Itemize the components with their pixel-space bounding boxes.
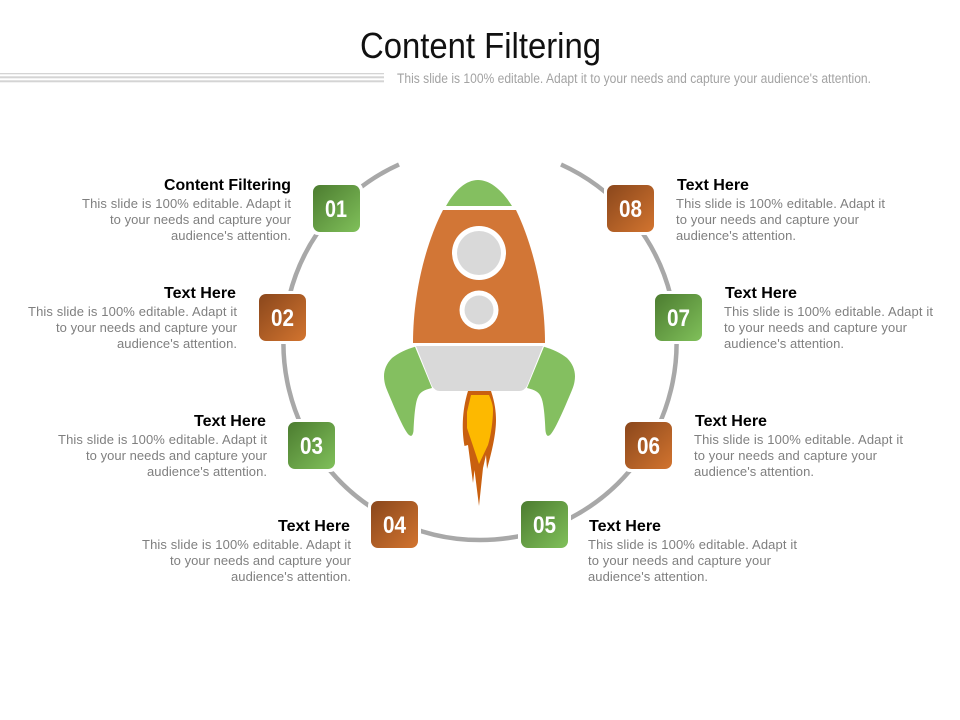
item 06: 06 bbox=[637, 433, 660, 460]
item 07: This slide is 100% editable. Adapt it bbox=[724, 304, 933, 319]
item 04: audience's attention. bbox=[231, 569, 351, 584]
item 05: Text Here bbox=[589, 518, 661, 535]
item 05: to your needs and capture your bbox=[588, 553, 772, 568]
item 08 bbox=[604, 177, 885, 243]
rocket large window bbox=[452, 226, 506, 280]
header rule lines bbox=[0, 73, 384, 82]
item 04: This slide is 100% editable. Adapt it bbox=[142, 537, 351, 552]
item 08: to your needs and capture your bbox=[676, 212, 860, 227]
rocket small window bbox=[460, 290, 498, 330]
item 05 bbox=[518, 498, 797, 584]
item 01 bbox=[82, 177, 363, 243]
flame inner bbox=[467, 395, 493, 464]
item 01: 01 bbox=[325, 196, 347, 223]
item 05: This slide is 100% editable. Adapt it bbox=[588, 537, 797, 552]
item 08: Text Here bbox=[677, 177, 749, 194]
item 03: This slide is 100% editable. Adapt it bbox=[58, 432, 267, 447]
item 06: Text Here bbox=[695, 413, 767, 430]
item 02: Text Here bbox=[164, 285, 236, 302]
subtitle: This slide is 100% editable. Adapt it to your needs and capture your audience's attention. bbox=[397, 71, 871, 86]
rocket engine base bbox=[416, 346, 543, 391]
item 08: audience's attention. bbox=[676, 228, 796, 243]
item 06: audience's attention. bbox=[694, 464, 814, 479]
rocket nose cone bbox=[446, 180, 512, 206]
item 02: 02 bbox=[271, 305, 294, 332]
item 04: to your needs and capture your bbox=[170, 553, 352, 568]
item 06: to your needs and capture your bbox=[694, 448, 878, 463]
item 04: Text Here bbox=[278, 518, 350, 535]
rocket illustration bbox=[384, 180, 575, 506]
item 07: to your needs and capture your bbox=[724, 320, 908, 335]
item 03: to your needs and capture your bbox=[86, 448, 268, 463]
item 01: to your needs and capture your bbox=[110, 212, 292, 227]
item 08: 08 bbox=[619, 196, 642, 223]
item 03: audience's attention. bbox=[147, 464, 267, 479]
item 06: This slide is 100% editable. Adapt it bbox=[694, 432, 903, 447]
item 07: 07 bbox=[667, 305, 690, 332]
item 03: Text Here bbox=[194, 413, 266, 430]
ring around the rocket bbox=[284, 164, 676, 540]
item 02: This slide is 100% editable. Adapt it bbox=[28, 304, 237, 319]
right fin bbox=[527, 347, 575, 436]
item 05: 05 bbox=[533, 512, 556, 539]
flame outer bbox=[463, 391, 496, 506]
item 04 bbox=[142, 498, 421, 584]
item 07 bbox=[652, 285, 933, 351]
item 01: This slide is 100% editable. Adapt it bbox=[82, 196, 291, 211]
item 07: audience's attention. bbox=[724, 336, 844, 351]
left fin bbox=[384, 347, 432, 436]
item 06 bbox=[622, 413, 903, 479]
title: Content Filtering bbox=[360, 25, 601, 66]
item 05: audience's attention. bbox=[588, 569, 708, 584]
item 02 bbox=[28, 285, 309, 351]
item 07: Text Here bbox=[725, 285, 797, 302]
item 04: 04 bbox=[383, 512, 407, 539]
item 01: Content Filtering bbox=[164, 177, 291, 194]
item 02: to your needs and capture your bbox=[56, 320, 238, 335]
item 03: 03 bbox=[300, 433, 323, 460]
rocket body bbox=[413, 210, 545, 343]
item 08: This slide is 100% editable. Adapt it bbox=[676, 196, 885, 211]
item 02: audience's attention. bbox=[117, 336, 237, 351]
item 01: audience's attention. bbox=[171, 228, 291, 243]
item 03 bbox=[58, 413, 338, 479]
